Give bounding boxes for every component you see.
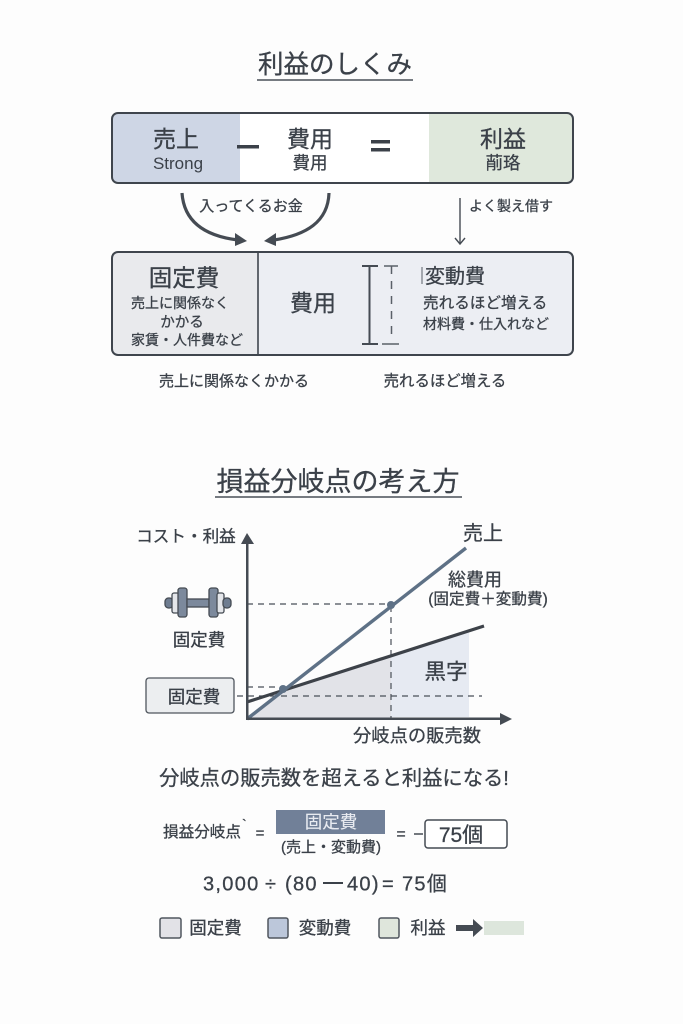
profit label: 黒字 (424, 660, 468, 684)
equation term: cost: 費用 (287, 126, 333, 152)
bracket: cost range solid (362, 266, 378, 344)
worked example: 40) (347, 874, 380, 896)
icon: dumbbell (165, 588, 231, 617)
fixed cost label under icon: 固定費 (173, 630, 225, 650)
total cost label: 総費用 (448, 570, 502, 590)
y axis (241, 533, 254, 720)
legend: variable cost: 変動費 (299, 918, 351, 938)
variable cost block (422, 265, 549, 332)
formula numerator: 固定費 (305, 812, 357, 832)
variable cost block: 売れるほど増える (423, 294, 547, 312)
caption: variable cost: 売れるほど増える (384, 372, 506, 390)
fixed cost tag: 固定費 (168, 687, 220, 707)
statement: break-even message: 分岐点の販売数を超えると利益になる! (159, 767, 509, 790)
formula denominator: (売上・変動費) (281, 839, 381, 856)
bracket: cost range dashed (382, 266, 399, 344)
result box (425, 820, 507, 848)
sales line (247, 548, 466, 719)
cost label: 費用 (290, 290, 336, 316)
arrow: profit down (455, 198, 465, 244)
shaded area: loss region (247, 657, 391, 719)
formula: ` (242, 816, 247, 832)
fixed cost tag (146, 678, 234, 713)
equation term: profit: 利益 (480, 126, 526, 152)
legend (160, 918, 524, 938)
worked example (203, 872, 448, 896)
formula equals: = (396, 826, 406, 843)
y axis label: コスト・利益 (136, 527, 236, 546)
sales label: 売上 (463, 522, 503, 545)
panel: profit equation (112, 113, 573, 183)
worked example: ÷ (265, 874, 277, 896)
arrow: cost to cost breakdown (264, 193, 329, 246)
worked example: (80 (285, 874, 318, 896)
formula: = (256, 825, 265, 842)
legend: fixed cost: 固定費 (189, 918, 242, 938)
legend: profit (379, 918, 446, 938)
legend: variable cost (268, 918, 351, 938)
variable cost block: 変動費 (425, 265, 485, 288)
equation term: cost: 費用 (292, 153, 328, 173)
fixed cost block: 売上に関係なく (131, 295, 229, 311)
equation term: profit: 萷珞 (486, 153, 521, 173)
equation term: sales (153, 126, 203, 173)
caption: fixed cost: 売上に関係なくかかる (159, 373, 309, 390)
fixed cost block (131, 265, 243, 348)
arrow: legend (456, 919, 483, 937)
total cost label (428, 570, 548, 608)
cost line (247, 626, 484, 702)
legend: fixed cost (160, 918, 242, 938)
variable cost block: 材料費・仕入れなど (423, 316, 549, 332)
equation term: sales: 売上 (153, 126, 199, 152)
worked example: 75個 (402, 872, 448, 896)
fixed cost block: 固定費 (149, 265, 219, 291)
chart: break-even (136, 522, 548, 746)
legend swatch: profit band (484, 921, 524, 935)
title: break-even: 損益分岐点の考え方 (216, 467, 460, 497)
minus sign (237, 145, 259, 148)
x axis label: 分岐点の販売数 (353, 725, 481, 746)
formula numerator (276, 810, 385, 834)
panel: cost breakdown (112, 252, 573, 355)
arrow: sales to cost breakdown (182, 193, 247, 246)
formula (163, 810, 507, 856)
formula left side: 損益分岐点 (163, 823, 241, 841)
result box: 75個 (439, 824, 483, 847)
legend: profit: 利益 (410, 918, 446, 938)
equation term: profit (480, 126, 526, 173)
fixed cost block: 家賃・人件費など (131, 332, 243, 348)
break-even points (279, 601, 395, 693)
title: profit structure: 利益のしくみ (258, 51, 412, 79)
shaded area: profit region (391, 632, 469, 717)
label: profit note: よく製え借す (469, 198, 553, 214)
equation term: cost (287, 126, 333, 173)
total cost label: (固定費＋変動費) (428, 590, 548, 608)
fixed cost block: かかる (160, 314, 204, 331)
x axis (247, 713, 512, 725)
worked example: 3,000 (203, 874, 260, 896)
label: incoming money: 入ってくるお金 (199, 198, 303, 215)
dashed guide lines (237, 604, 482, 718)
worked example: = (382, 874, 395, 896)
equals sign (371, 140, 390, 152)
equation term: sales: Strong (153, 154, 203, 173)
